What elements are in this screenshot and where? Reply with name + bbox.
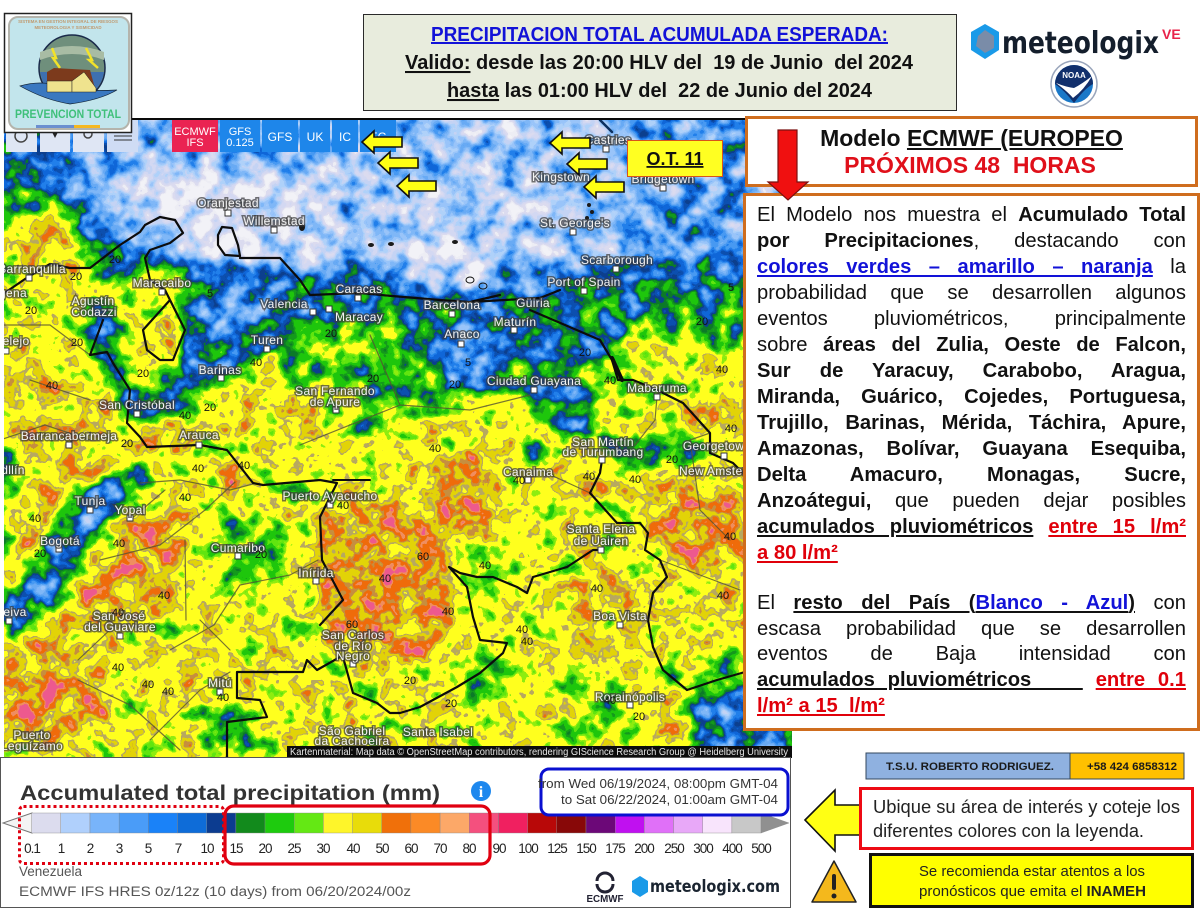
model selector buttons: GFS (229, 126, 251, 138)
city labels: Barcelona (424, 298, 480, 312)
callout: compare with legend: Ubique su área de interés y coteje los (873, 797, 1180, 817)
contour numbers: 20 (696, 316, 708, 328)
city labels: Willemstad (243, 214, 305, 228)
contour numbers: 40 (29, 513, 41, 525)
city labels: dllín (1, 463, 25, 477)
contact bar (866, 753, 1184, 779)
city labels: Scarborough (581, 253, 653, 267)
legend scale labels: 125 (547, 841, 567, 856)
contour numbers: 40 (238, 460, 250, 472)
city labels: Georgetown (683, 439, 751, 453)
contour numbers: 40 (429, 443, 441, 455)
city labels: Negro (336, 649, 370, 663)
validity lines: Valido: desde las 20:00 HLV del 19 de Junio del 2024 (405, 51, 914, 74)
contour numbers: 40 (521, 636, 533, 648)
forecast text first paragraph: a 80 l/m² (757, 542, 838, 564)
contour numbers: 40 (162, 686, 174, 698)
legend scale labels: 5 (145, 841, 152, 856)
contour numbers (25, 254, 737, 723)
arrow: yellow legend pointer (805, 790, 862, 851)
legend scale labels (24, 841, 771, 856)
legend scale labels: 7 (175, 841, 182, 856)
city markers (3, 146, 727, 708)
city labels: Maturín (494, 315, 536, 329)
land yellow (4, 220, 743, 757)
contour numbers: 5 (207, 288, 213, 300)
city labels: Maracay (335, 310, 383, 324)
legend scale labels: 20 (258, 841, 272, 856)
legend scale labels: 0.1 (24, 841, 40, 856)
city labels: Mitú (208, 676, 232, 690)
city labels: eiva (3, 605, 27, 619)
forecast text first paragraph: probabilidad que se desarrollen algunos (757, 282, 1186, 304)
contour numbers: 40 (724, 531, 736, 543)
city labels: del Guaviare (84, 620, 156, 634)
forecast text first paragraph: Amazonas, Bolívar, Guayana Esequiba, (757, 438, 1186, 460)
contour numbers: 40 (725, 423, 737, 435)
legend region name: Venezuela (19, 864, 83, 879)
city labels: Cumaribo (211, 541, 265, 555)
contour numbers: 40 (479, 560, 491, 572)
panel: forecast description (743, 193, 1200, 731)
city labels: Port of Spain (547, 275, 621, 289)
legend scale labels: 3 (116, 841, 123, 856)
contour numbers: 40 (716, 364, 728, 376)
blue streaks (158, 298, 292, 402)
city labels: San Fernando (295, 384, 375, 398)
contour numbers: 20 (204, 402, 216, 414)
city labels: Yopal (114, 503, 146, 517)
contour numbers: 40 (113, 538, 125, 550)
city labels: Turen (251, 333, 283, 347)
city labels: Valencia (260, 297, 308, 311)
greens (293, 320, 400, 375)
logo: meteologix.com: meteologix.com (650, 877, 780, 897)
city labels: Agustín (72, 294, 114, 308)
contour numbers: 40 (179, 410, 191, 422)
city labels: Inírida (298, 566, 334, 580)
contour numbers: 40 (583, 471, 595, 483)
legend scale labels: 2 (87, 841, 94, 856)
logo: NOAA (1051, 61, 1097, 107)
city labels: Tunja (74, 494, 106, 508)
logo: prevencion total: PREVENCION TOTAL (15, 107, 121, 121)
city labels: San Carlos (322, 628, 384, 642)
city labels (0, 133, 771, 753)
city labels: de Apure (310, 395, 360, 409)
legend scale labels: 70 (433, 841, 447, 856)
logo: ECMWF: ECMWF (586, 894, 624, 905)
contour numbers: 20 (25, 305, 37, 317)
forecast text first paragraph: Delta Amacuro, Monagas, Sucre, (757, 464, 1186, 486)
contour numbers: 40 (217, 692, 229, 704)
forecast text first paragraph (757, 204, 1186, 564)
city labels: Anaco (444, 327, 480, 341)
map: precipitation forecast (4, 118, 792, 758)
contour numbers: 5 (465, 357, 471, 369)
city labels: Santa Elena (567, 522, 635, 536)
yellow arrows: left group (362, 131, 436, 197)
callout: compare with legend: diferentes colores con la leyenda. (873, 821, 1144, 841)
highlight: date range: to Sat 06/22/2024, 01:00am GMT-04 (561, 792, 778, 807)
city labels: Barranquilla (0, 262, 66, 276)
city labels: New Amsterdam (679, 464, 771, 478)
contour numbers: 40 (379, 573, 391, 585)
map toolbar icons (6, 120, 138, 152)
map frame (132, 118, 745, 120)
legend scale labels: 60 (404, 841, 418, 856)
contour numbers: 20 (579, 347, 591, 359)
contour numbers: 20 (137, 368, 149, 380)
legend scale labels: 175 (605, 841, 625, 856)
highlight: date range: from Wed 06/19/2024, 08:00pm GMT-04 (538, 776, 778, 791)
city labels: Bogotá (40, 534, 80, 548)
callout: INAMEH recommendation: pronósticos que emita el INAMEH (919, 883, 1146, 900)
icon: info (471, 781, 491, 801)
legend scale labels: 50 (375, 841, 389, 856)
logo: ECMWF (586, 873, 624, 905)
city labels: Leguízamo (1, 739, 63, 753)
city labels: Codazzi (71, 305, 117, 319)
model selector buttons: EC (370, 130, 387, 144)
contour numbers: 60 (346, 619, 358, 631)
contour numbers: 20 (404, 675, 416, 687)
forecast text first paragraph: eventos pluviométricos, principalmente (757, 308, 1186, 330)
callout: compare with legend (860, 788, 1192, 848)
model selector buttons: ECMWF (174, 126, 216, 138)
legend scale labels: 100 (518, 841, 538, 856)
legend title: Accumulated total precipitation (mm) (20, 782, 440, 805)
city labels: Canaima (503, 465, 553, 479)
contour numbers: 40 (604, 375, 616, 387)
forecast text first paragraph: Sur de Yaracuy, Carabobo, Aragua, (757, 360, 1186, 382)
city labels: Caracas (336, 282, 382, 296)
logo: prevencion total: METEOROLOGIA Y SISMICIDAD (34, 25, 102, 30)
legend scale labels: 150 (576, 841, 596, 856)
contour numbers: 40 (112, 662, 124, 674)
highlight: date range (538, 769, 788, 815)
city labels: St. George's (540, 216, 610, 230)
panel: colour legend (0, 753, 1192, 908)
icon: warning triangle (812, 861, 856, 902)
city labels: San Martín (572, 435, 634, 449)
city labels: elejo (3, 334, 29, 348)
arrow: red down arrow (768, 130, 808, 200)
forecast text first paragraph: Anzoátegui, que pueden dejar posibles (757, 490, 1186, 512)
legend scale labels: 200 (634, 841, 654, 856)
panel: title header: hasta las 01:00 HLV del 22 de Junio del 2024 (447, 79, 873, 102)
legend scale labels: 300 (693, 841, 713, 856)
land green (4, 179, 696, 423)
model selector buttons (172, 120, 396, 152)
contour numbers: 20 (121, 438, 133, 450)
city labels: Ciudad Guayana (487, 374, 581, 388)
contour numbers: 20 (666, 454, 678, 466)
legend scale labels: 25 (287, 841, 301, 856)
subtitle: próximos 48 horas: PRÓXIMOS 48 HORAS (844, 151, 1096, 178)
contour numbers: 40 (442, 606, 454, 618)
forecast text second paragraph: acumulados pluviométricos entre 0.1 (757, 669, 1186, 691)
contour numbers: 20 (449, 379, 461, 391)
contour numbers: 20 (34, 548, 46, 560)
forecast text first paragraph: sobre áreas del Zulia, Oeste de Falcon, (757, 334, 1186, 356)
contour numbers: 20 (255, 549, 267, 561)
city labels: de Río (334, 639, 372, 653)
forecast text first paragraph: acumulados pluviométricos entre 15 l/m² (757, 516, 1186, 538)
contour numbers: 5 (728, 282, 734, 294)
legend scale labels: 1 (58, 841, 65, 856)
islands (299, 203, 594, 289)
contour numbers: 40 (604, 695, 616, 707)
forecast text first paragraph: El Modelo nos muestra el Acumulado Total (757, 204, 1186, 226)
model selector buttons: IFS (186, 137, 204, 149)
oranges (10, 360, 55, 385)
contour numbers: 20 (633, 711, 645, 723)
model selector buttons: UK (307, 130, 323, 144)
contour numbers: 20 (445, 698, 457, 710)
forecast text first paragraph: Trujillo, Barinas, Mérida, Táchira, Apure, (757, 412, 1186, 434)
contour numbers: 40 (142, 679, 154, 691)
model selector buttons: 0.125 (226, 137, 254, 149)
model selector buttons: IC (339, 130, 351, 144)
icon: info: i (479, 784, 484, 801)
city labels: Maracaibo (133, 276, 191, 290)
logo: meteologix: meteologix (1002, 26, 1159, 61)
contour numbers: 40 (250, 357, 262, 369)
legend scale labels: 90 (492, 841, 506, 856)
city labels: Oranjestad (197, 196, 259, 210)
contact bar: T.S.U. ROBERTO RODRIGUEZ. (886, 761, 1054, 773)
legend model note: ECMWF IFS HRES 0z/12z (10 days) from 06/20/2024/00z (19, 884, 411, 899)
logo: meteologix: VE (1162, 26, 1181, 42)
callout: INAMEH recommendation (870, 854, 1192, 906)
forecast text second paragraph: El resto del País (Blanco - Azul) con (757, 592, 1186, 614)
contour numbers: 40 (717, 590, 729, 602)
forecast text first paragraph: Miranda, Guárico, Cojedes, Portuguesa, (757, 386, 1186, 408)
contour numbers: 40 (516, 624, 528, 636)
city labels: San Cristóbal (99, 398, 175, 412)
panel: model heading (745, 116, 1198, 187)
contour numbers: 40 (192, 463, 204, 475)
city labels: Puerto (13, 728, 51, 742)
label: O.T. 11 (628, 140, 722, 176)
city labels: Barrancabermeja (21, 429, 117, 443)
yellow arrows: right group (550, 132, 624, 198)
city labels: Mabaruma (627, 381, 687, 395)
model selector buttons: GFS (268, 130, 292, 144)
forecast text second paragraph: l/m² a 15 l/m² (757, 695, 885, 717)
label: O.T. 11: O.T. 11 (646, 149, 704, 169)
model name: Modelo ECMWF (EUROPEO (820, 125, 1123, 151)
legend scale labels: 30 (316, 841, 330, 856)
legend colour bar (3, 813, 789, 833)
logo: prevencion total (4, 14, 132, 132)
forecast text second paragraph (757, 592, 1186, 717)
legend scale labels: 10 (200, 841, 214, 856)
legend scale labels: 400 (722, 841, 742, 856)
contact bar: +58 424 6858312 (1087, 761, 1177, 773)
contour numbers: 40 (158, 590, 170, 602)
contour numbers: 60 (417, 551, 429, 563)
contour numbers: 20 (71, 337, 83, 349)
city labels: Rorainópolis (595, 690, 665, 704)
title line: PRECIPITACION TOTAL ACUMULADA ESPERADA: (431, 24, 888, 46)
contour numbers: 40 (46, 380, 58, 392)
forecast text second paragraph: eventos de Baja intensidad con (757, 643, 1186, 665)
contour numbers: 40 (112, 607, 124, 619)
logo: prevencion total: SISTEMA EN GESTION INTEGRAL DE RIESGOS (18, 19, 118, 24)
city labels: de Turumbang (562, 445, 644, 459)
legend scale labels: 15 (229, 841, 243, 856)
city labels: Puerto Ayacucho (282, 489, 378, 503)
legend scale labels: 500 (751, 841, 771, 856)
contour numbers: 20 (70, 271, 82, 283)
contour numbers: 40 (179, 492, 191, 504)
logo: NOAA: NOAA (1062, 71, 1086, 80)
contour numbers: 20 (109, 254, 121, 266)
map field: contour colours (4, 120, 792, 757)
legend scale labels: 80 (462, 841, 476, 856)
city labels: Bridgetown (631, 172, 695, 186)
city labels: Santa Isabel (403, 725, 473, 739)
callout: INAMEH recommendation: Se recomienda estar atentos a los (919, 863, 1145, 880)
contour numbers: 40 (591, 583, 603, 595)
forecast text second paragraph: escasa probabilidad que se desarrollen (757, 618, 1186, 640)
city labels: São Gabriel (319, 724, 385, 738)
contour numbers: 20 (367, 373, 379, 385)
city labels: Castries (585, 133, 631, 147)
highlight: 15 to 80 range (225, 806, 490, 864)
city labels: da Cachoeira (315, 734, 390, 748)
legend scale labels: 40 (346, 841, 360, 856)
city labels: Kingstown (532, 170, 590, 184)
highlight: 0.1 to 10 range (20, 806, 224, 864)
political borders (0, 120, 745, 760)
city labels: de Uairen (574, 534, 628, 548)
legend scale labels: 250 (664, 841, 684, 856)
city labels: Barinas (199, 363, 241, 377)
city labels: Boa Vista (593, 609, 647, 623)
contour numbers: 40 (513, 475, 525, 487)
forecast text first paragraph: colores verdes – amarillo – naranja la (757, 256, 1186, 278)
city labels: San José (93, 609, 145, 623)
city labels: Arauca (179, 428, 219, 442)
panel: title header (364, 14, 956, 110)
contour numbers: 40 (337, 500, 349, 512)
forecast text first paragraph: por Precipitaciones, destacando con (757, 230, 1186, 252)
city labels: Güiria (516, 296, 550, 310)
contour numbers: 20 (325, 328, 337, 340)
contour numbers: 40 (629, 474, 641, 486)
